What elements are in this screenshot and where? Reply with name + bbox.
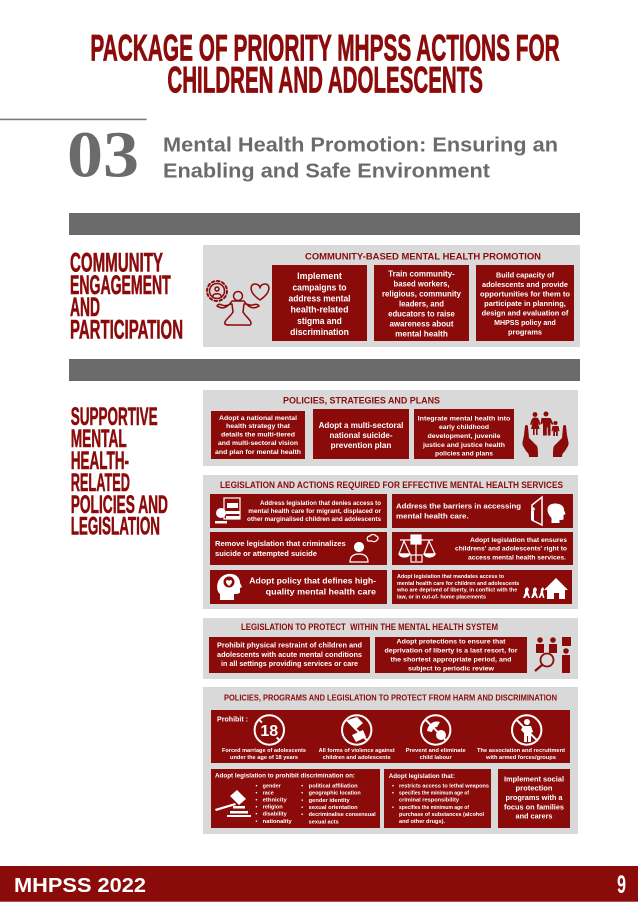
legislation list: • xyxy=(392,805,394,811)
box: prohibit physical restraint: adolescents with acute mental conditions xyxy=(217,652,362,659)
section subtitle xyxy=(163,134,558,182)
box: adopt protections: deprivation of liberty is a last resort, for xyxy=(384,648,518,655)
box: build capacity xyxy=(476,265,574,341)
panel heading: COMMUNITY-BASED MENTAL HEALTH PROMOTION xyxy=(305,252,541,262)
box: adopt protections: the shortest appropriate period, and xyxy=(390,657,512,664)
panel heading: LEGISLATION AND ACTIONS REQUIRED FOR EFFECTIVE MENTAL HEALTH SERVICES xyxy=(220,480,563,490)
discrimination list column 2: gender identity xyxy=(309,798,350,804)
heading: supportive policies and legislation xyxy=(71,404,168,540)
discrimination list column 2: • xyxy=(301,784,303,790)
box: build capacity: programs xyxy=(508,327,542,336)
box: remove legislation: Remove legislation that criminalizes xyxy=(215,539,346,548)
discrimination list column 1: gender xyxy=(263,784,281,790)
box: remove legislation xyxy=(210,532,387,565)
box: prohibit xyxy=(211,710,570,763)
box: adopt protections: subject to periodic review xyxy=(408,666,495,673)
prohibit captions: All forms of violence against xyxy=(319,748,395,754)
heading: community engagement xyxy=(70,248,183,344)
discrimination list column 1: • xyxy=(256,812,258,818)
box: build capacity: opportunities for them to xyxy=(480,290,570,299)
box: prohibit physical restraint xyxy=(209,637,370,673)
box: national mental health strategy: and multi-sectoral vision xyxy=(218,440,298,447)
box: implement campaigns: campaigns to xyxy=(292,282,347,292)
heading: supportive policies and legislation: POLICIES AND xyxy=(71,492,168,519)
box: implement campaigns: address mental xyxy=(288,294,350,304)
box: implement social protection: Implement social xyxy=(504,774,564,783)
icon: no under 18: 18 xyxy=(260,723,278,740)
box: right to access: access mental health services. xyxy=(468,554,566,561)
discrimination list column 2: decriminalise consensual xyxy=(309,812,376,818)
box: integrate mental health: Integrate mental health into xyxy=(418,416,510,422)
box: high-quality care: Adopt policy that defines high- xyxy=(249,577,376,586)
box: implement social protection: focus on families xyxy=(504,802,564,811)
icon: no armed recruitment xyxy=(512,715,541,745)
legislation list: • xyxy=(392,790,394,796)
heading: community engagement: PARTICIPATION xyxy=(70,314,183,344)
icon: people and magnifying glass xyxy=(535,637,571,673)
icon: scales and fist xyxy=(399,535,435,562)
legislation list: specifies the minimum age of xyxy=(399,791,469,797)
icon: no child labour xyxy=(421,715,450,745)
box: train community workers: Train community- xyxy=(388,270,455,278)
box: build capacity: adolescents and provide xyxy=(482,280,568,289)
box heading: Adopt legislation to prohibit discrimination on: xyxy=(215,773,355,780)
box: build capacity: design and evaluation of xyxy=(482,308,569,317)
box: train community workers: based workers, xyxy=(394,280,450,288)
page number: 9 xyxy=(617,871,626,899)
prohibit captions: child labour xyxy=(420,755,453,761)
panel: legislation and actions xyxy=(203,475,578,609)
icon: barrier wall and head xyxy=(531,497,566,525)
box: right to access: childrens' and adolescents' right to xyxy=(455,546,567,553)
icon: family held in hands xyxy=(522,412,569,457)
box: national mental health strategy: and plan for mental health xyxy=(215,449,301,456)
discrimination list column 1: disability xyxy=(263,812,287,818)
prohibit captions: children and adolescents xyxy=(323,755,391,761)
box: address legislation: Address legislation that denies access to xyxy=(260,501,381,507)
box: suicide-prevention plan: Adopt a multi-sectoral xyxy=(319,421,403,430)
panel heading: POLICIES, PROGRAMS AND LEGISLATION TO PROTECT FROM HARM AND DISCRIMINATION xyxy=(224,693,557,703)
box: national mental health strategy: Adopt a national mental xyxy=(219,415,297,422)
legislation list: • xyxy=(392,784,394,790)
footer label: MHPSS 2022 xyxy=(14,874,146,897)
legislation list: and other drugs). xyxy=(399,819,446,825)
box: implement social protection xyxy=(498,769,570,828)
box: suicide-prevention plan xyxy=(313,409,409,459)
discrimination list column 2: geographic location xyxy=(309,791,361,797)
legislation list: criminal responsibility xyxy=(399,798,459,804)
prohibit captions: Prevent and eliminate xyxy=(406,748,466,754)
box: suicide-prevention plan: national suicide- xyxy=(330,431,393,440)
box: implement campaigns: discrimination xyxy=(290,327,349,337)
box: implement campaigns xyxy=(272,265,367,341)
icon: no violence xyxy=(342,715,371,745)
box: suicide-prevention plan: prevention plan xyxy=(331,441,392,450)
box: integrate mental health xyxy=(414,409,514,459)
discrimination list column 2: • xyxy=(301,805,303,811)
box: build capacity: Build capacity of xyxy=(496,271,555,280)
box: integrate mental health: early childhood xyxy=(439,424,489,431)
box: implement social protection: and carers xyxy=(516,812,552,821)
panel: community-based mental health promotion xyxy=(203,245,580,347)
box: train community workers: leaders, and xyxy=(399,300,444,308)
discrimination list column 1: ethnicity xyxy=(263,798,287,804)
box: build capacity: participate in planning, xyxy=(484,299,566,308)
box: high-quality care: quality mental health care xyxy=(266,588,377,597)
prohibit label: Prohibit : xyxy=(217,716,248,724)
heading: community engagement: ENGAGEMENT xyxy=(70,270,171,300)
discrimination list column 2: • xyxy=(301,798,303,804)
title xyxy=(90,27,560,101)
prohibit captions: Forced marriage of adolescents xyxy=(222,748,306,754)
heading: community engagement: AND xyxy=(70,292,100,322)
box: integrate mental health: justice and justice health xyxy=(422,442,505,449)
box: national mental health strategy: health strategy that xyxy=(226,423,291,430)
box: mandates access xyxy=(392,570,572,604)
box: high-quality care xyxy=(210,570,387,604)
heading: supportive policies and legislation: HEALTH- xyxy=(71,448,129,475)
panel: policies, strategies and plans xyxy=(203,390,578,466)
section subtitle: Enabling and Safe Environment xyxy=(163,159,490,182)
section subtitle: Mental Health Promotion: Ensuring an xyxy=(163,134,558,157)
box: adopt protections: Adopt protections to ensure that xyxy=(396,639,506,646)
box: train community workers: educators to raise xyxy=(388,310,455,318)
panel: policies, programs and legislation xyxy=(203,687,578,834)
box: address barriers: Address the barriers in accessing xyxy=(396,501,521,510)
box: right to access xyxy=(392,532,573,565)
discrimination list column 2 xyxy=(301,784,376,826)
prohibit captions: under the age of 18 years xyxy=(230,755,298,761)
heading: community engagement: COMMUNITY xyxy=(70,248,163,278)
discrimination list column 1: • xyxy=(256,798,258,804)
legislation list: restricts access to lethal weapons xyxy=(399,784,489,790)
discrimination list column 2: sexual acts xyxy=(309,820,339,826)
footer xyxy=(0,866,638,902)
box: address legislation: other marginalised children and adolescents xyxy=(247,517,382,523)
discrimination list column 1: • xyxy=(256,819,258,825)
discrimination list column 1: • xyxy=(256,784,258,790)
icon: meditating person with gear and heart xyxy=(207,281,269,325)
panel heading: POLICIES, STRATEGIES AND PLANS xyxy=(283,395,440,405)
box heading: Adopt legislation that: xyxy=(389,773,455,780)
discrimination list column 1 xyxy=(256,784,292,825)
legislation list xyxy=(392,784,489,825)
discrimination list column 1: religion xyxy=(263,805,283,811)
box: implement campaigns: stigma and xyxy=(297,316,342,326)
discrimination list column 2: political affiliation xyxy=(309,784,358,790)
box: address barriers: mental health care. xyxy=(396,511,469,520)
box: integrate mental health: development, juvenile xyxy=(428,433,501,440)
box: adopt protections xyxy=(375,637,527,673)
discrimination list column 1: race xyxy=(263,791,274,797)
box: address legislation xyxy=(210,494,387,528)
heading: supportive policies and legislation: RELATED xyxy=(71,470,130,497)
prohibit captions xyxy=(222,748,565,761)
box: prohibit physical restraint: in all settings providing services or care xyxy=(221,661,358,668)
icon: gavel xyxy=(215,790,251,817)
box: implement social protection: protection xyxy=(516,784,553,793)
box: mandates access: law, or in out-of- home placements xyxy=(397,594,486,600)
box: train community workers: awareness about xyxy=(390,320,454,328)
box: implement campaigns: health-related xyxy=(290,304,348,314)
discrimination list column 1: • xyxy=(256,804,258,810)
box: adopt legislation that xyxy=(384,769,491,828)
discrimination list column 1: nationality xyxy=(263,819,292,825)
discrimination list column 2: • xyxy=(301,812,303,818)
box: prohibit discrimination xyxy=(211,769,380,828)
prohibit captions: with armed forces/groups xyxy=(485,755,556,761)
box: implement campaigns: Implement xyxy=(297,271,342,281)
box: prohibit physical restraint: Prohibit physical restraint of children and xyxy=(217,642,362,650)
box: mandates access: mental health care for children and adolescents xyxy=(397,581,519,587)
discrimination list column 2: • xyxy=(301,790,303,796)
box: address barriers xyxy=(392,494,573,528)
box: national mental health strategy: details the multi-tiered xyxy=(221,432,295,438)
panel heading: LEGISLATION TO PROTECT WITHIN THE MENTAL HEALTH SYSTEM xyxy=(241,622,498,632)
discrimination list column 1: • xyxy=(256,790,258,796)
box: build capacity: MHPSS policy and xyxy=(494,318,556,327)
box: train community workers: mental health xyxy=(395,330,448,338)
box: mandates access: Adopt legislation that mandates access to xyxy=(397,574,504,580)
box: train community workers xyxy=(374,265,469,341)
icon: head with heart xyxy=(217,574,242,600)
icon: no under 18 xyxy=(255,715,284,745)
discrimination list column 2: sexual orientation xyxy=(309,805,358,811)
box: train community workers: religious, community xyxy=(382,290,462,298)
box: implement social protection: programs with a xyxy=(506,793,563,802)
box: mandates access: who are deprived of liberty, in conflict with the xyxy=(396,588,517,594)
heading: supportive policies and legislation: SUPPORTIVE xyxy=(71,404,158,431)
box: remove legislation: suicide or attempted suicide xyxy=(215,549,317,558)
box: right to access: Adopt legislation that ensures xyxy=(470,537,568,544)
panel: legislation to protect within the mental health system xyxy=(203,618,578,679)
heading: supportive policies and legislation: LEGISLATION xyxy=(71,514,160,540)
icon: documents and gear xyxy=(215,498,240,524)
legislation list: purchase of substances (alcohol xyxy=(399,812,484,818)
section number: 03 xyxy=(67,119,139,192)
box: address legislation: mental health care for migrant, displaced or xyxy=(248,509,382,515)
box: integrate mental health: policies and plans xyxy=(435,450,493,458)
icon: children and house xyxy=(523,578,568,599)
prohibit captions: The association and recruitment xyxy=(477,748,565,754)
legislation list: specifies the minimum age of xyxy=(399,805,469,811)
heading: supportive policies and legislation: MENTAL xyxy=(71,426,127,453)
box: national mental health strategy xyxy=(211,411,305,459)
icon: person with thought bubble xyxy=(350,534,378,562)
